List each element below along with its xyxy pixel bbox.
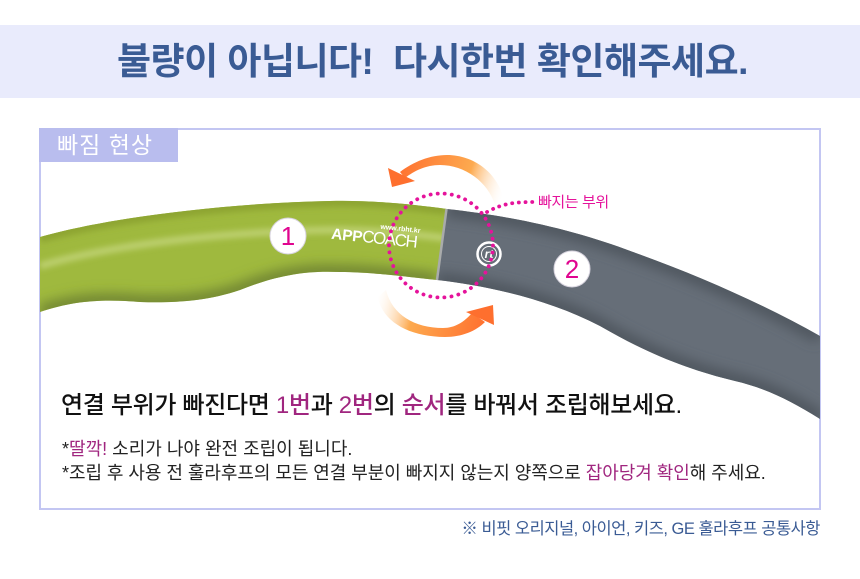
title: 불량이 아닙니다! 다시한번 확인해주세요. [117, 41, 748, 82]
panel heading: 빠짐 현상 [57, 132, 153, 158]
number badge 2: 2 [565, 254, 579, 284]
arrow: rotate right [378, 290, 494, 337]
grey hoop segment 2 [437, 209, 820, 419]
hoop brand text: www.rbht.kr [379, 224, 421, 235]
callout: slip point label: 빠지는 부위 [538, 194, 609, 211]
title banner [0, 25, 860, 98]
hoop logo badge [478, 242, 500, 266]
hoop brand text: APPCOACH [330, 224, 418, 252]
panel: slip-out phenomenon [39, 128, 821, 510]
green hoop segment 1 [40, 201, 447, 312]
arrow: rotate left [388, 155, 503, 205]
panel tag [39, 128, 178, 162]
number badge 2 [554, 251, 590, 287]
note 2: *조립 후 사용 전 훌라후프의 모든 연결 부분이 빠지지 않는지 양쪽으로 잡아당겨 확인해 주세요. [62, 463, 766, 483]
main instruction: 연결 부위가 빠진다면 1번과 2번의 순서를 바꿔서 조립해보세요. [61, 392, 682, 419]
dotted leader line [487, 202, 533, 212]
hoop logo badge: rt [485, 247, 494, 261]
number badge 1 [270, 218, 306, 254]
note 1: *딸깍! 소리가 나야 완전 조립이 됩니다. [62, 439, 352, 459]
hula hoop illustration [40, 155, 820, 419]
footnote: ※ 비핏 오리지널, 아이언, 키즈, GE 훌라후프 공통사항 [461, 520, 820, 538]
dotted circle marking the slip point [389, 194, 493, 298]
number badge 1: 1 [281, 221, 295, 251]
